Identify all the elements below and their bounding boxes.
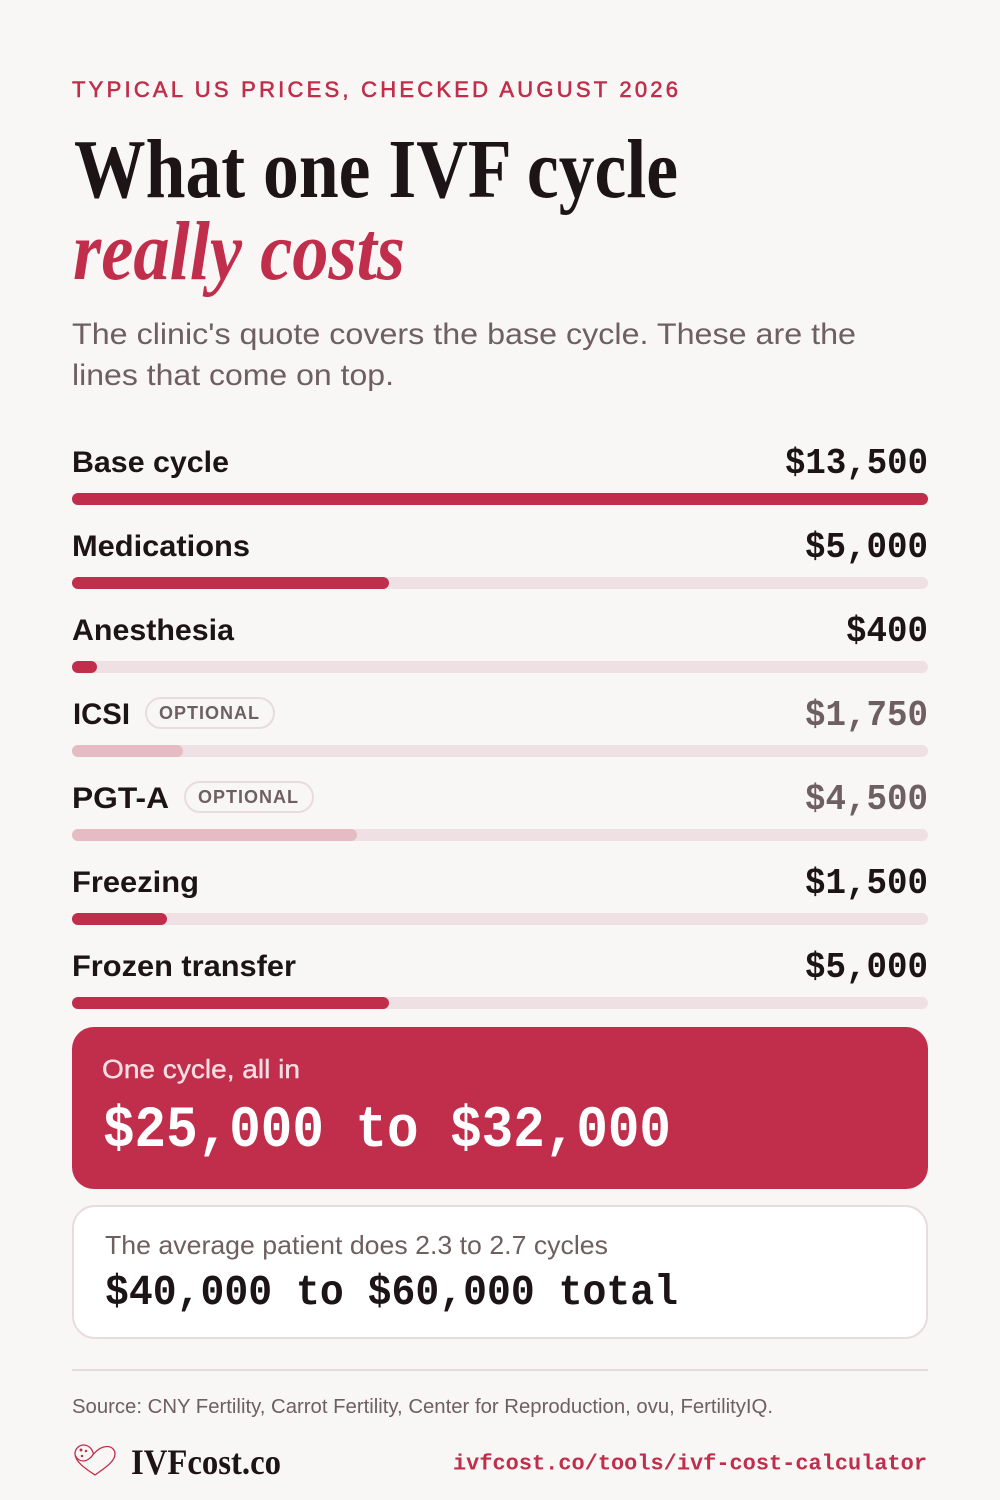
row: base cycle xyxy=(72,443,928,505)
subtitle: lines that come on top. xyxy=(72,359,394,392)
panel: one cycle total xyxy=(72,1027,928,1189)
row: PGT-A optional: OPTIONAL xyxy=(198,787,298,807)
row: medications: $5,000 xyxy=(805,527,928,568)
title: really costs xyxy=(73,205,405,298)
row: base cycle: $13,500 xyxy=(785,443,928,484)
row: freezing: Freezing xyxy=(72,866,199,899)
row: ICSI optional: ICSI xyxy=(73,698,130,731)
subtitle: The clinic's quote covers the base cycle. These are the xyxy=(72,318,856,351)
logo wordmark: IVFcost.co xyxy=(131,1442,281,1482)
row: medications xyxy=(72,527,928,589)
icon: heart logo xyxy=(75,1445,115,1475)
source note: Source: CNY Fertility, Carrot Fertility, Center for Reproduction, ovu, FertilityIQ. xyxy=(72,1396,773,1418)
panel: one cycle total: $25,000 to $32,000 xyxy=(103,1099,671,1164)
panel: average patient total: The average patient does 2.3 to 2.7 cycles xyxy=(105,1230,608,1260)
subtitle xyxy=(72,318,856,392)
row: PGT-A optional xyxy=(72,779,928,841)
panel: average patient total xyxy=(73,1206,927,1338)
calculator url: ivfcost.co/tools/ivf-cost-calculator xyxy=(453,1452,927,1476)
row: medications: Medications xyxy=(72,530,250,563)
row: anesthesia xyxy=(72,611,928,673)
eyebrow: TYPICAL US PRICES, CHECKED AUGUST 2026 xyxy=(72,77,678,102)
row: ICSI optional xyxy=(72,695,928,757)
panel: one cycle total: One cycle, all in xyxy=(102,1054,300,1084)
row: frozen transfer: Frozen transfer xyxy=(72,950,296,983)
panel: average patient total: $40,000 to $60,000 total xyxy=(105,1268,678,1317)
row: PGT-A optional: PGT-A xyxy=(72,782,169,815)
row: frozen transfer xyxy=(72,947,928,1009)
row: anesthesia: Anesthesia xyxy=(72,614,234,647)
row: frozen transfer: $5,000 xyxy=(805,947,928,988)
title: What one IVF cycle xyxy=(74,123,678,216)
title xyxy=(73,123,678,298)
row: ICSI optional: OPTIONAL xyxy=(159,703,259,723)
row: base cycle: Base cycle xyxy=(72,446,229,479)
row: PGT-A optional: $4,500 xyxy=(805,779,928,820)
row: freezing: $1,500 xyxy=(805,863,928,904)
row: freezing xyxy=(72,863,928,925)
row: anesthesia: $400 xyxy=(846,611,928,652)
row: ICSI optional: $1,750 xyxy=(805,695,928,736)
